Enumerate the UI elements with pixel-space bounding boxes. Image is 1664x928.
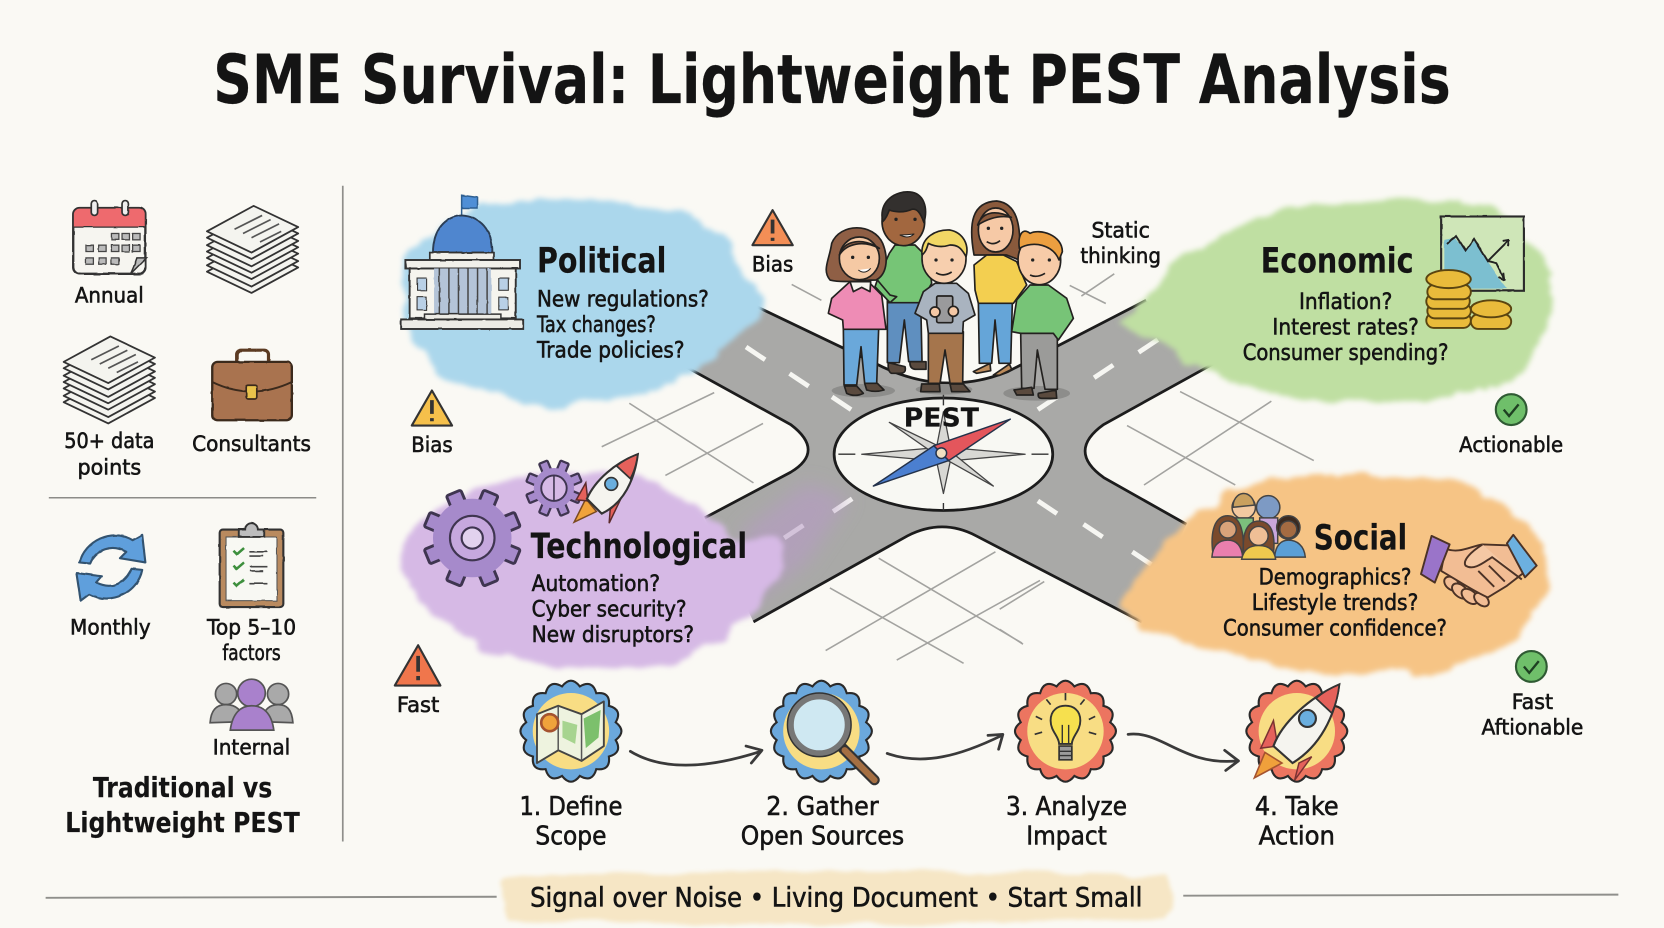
warning: fast [395, 645, 440, 718]
panel: technological [401, 451, 783, 667]
questions: technological [532, 571, 694, 648]
step 1: define scope [519, 681, 622, 852]
badge: map [520, 681, 621, 782]
step 4: take action [1246, 681, 1347, 852]
badge: magnifier [771, 681, 874, 782]
icon: monthly cycle arrows [76, 535, 145, 601]
footer banner: Signal over Noise • Living Document • Start Small [530, 882, 1142, 913]
label: static thinking: thinking [1080, 244, 1161, 269]
badge: light bulb [1015, 681, 1116, 782]
questions: social [1223, 565, 1447, 642]
heading: technological: Technological [531, 526, 747, 567]
questions: economic: Inflation? [1299, 289, 1392, 315]
label: internal: Internal [213, 736, 290, 761]
panel heading: traditional vs: Traditional vs [93, 771, 272, 804]
questions: economic [1243, 289, 1449, 366]
questions: technological: Cyber security? [532, 597, 687, 623]
purple tint over road [743, 483, 849, 610]
check: actionable [1459, 394, 1563, 458]
icon: briefcase [212, 350, 292, 420]
economic colour blob [1120, 200, 1549, 405]
icon: large gear [408, 474, 536, 602]
compass label: PEST [904, 404, 980, 434]
check: fast aftionable: Aftionable [1481, 715, 1583, 740]
icon: document stack, 50+ data points [64, 336, 155, 423]
step 2: gather open sources [741, 681, 904, 852]
step 1: define scope: Scope [535, 822, 606, 852]
panel: economic [1120, 200, 1549, 405]
questions: political: Trade policies? [536, 338, 684, 364]
check: fast aftionable [1481, 651, 1583, 740]
panel: political [399, 195, 764, 404]
check: actionable: Actionable [1459, 433, 1563, 458]
label: top 5-10: Top 5–10 [206, 616, 296, 641]
icon: line chart [1441, 216, 1524, 291]
process steps [519, 681, 1347, 852]
icon: rocket [574, 454, 638, 523]
step 2: gather open sources: Open Sources [741, 822, 904, 852]
step 4: take action: 4. Take [1255, 792, 1339, 822]
label: annual: Annual [75, 283, 144, 308]
people group [826, 192, 1073, 401]
warning: bias (orange) [752, 210, 793, 278]
social colour blob [1121, 473, 1549, 675]
icon: diverse group [1212, 493, 1305, 559]
step 3: analyze impact: 3. Analyze [1006, 792, 1127, 822]
warning: bias (yellow): Bias [411, 433, 453, 458]
step 3: analyze impact: Impact [1026, 822, 1107, 852]
panel: social [1121, 473, 1549, 675]
step 2: gather open sources: 2. Gather [766, 792, 879, 822]
person: man in green sweater [1012, 231, 1073, 398]
warning: bias (yellow) [411, 391, 453, 458]
label: factors: factors [222, 641, 281, 666]
arrow: step 3 to 4 [1128, 734, 1238, 770]
step 3: analyze impact [1006, 681, 1127, 852]
icon: government building [401, 195, 523, 329]
warning: fast: Fast [397, 693, 439, 718]
person: centre man with phone [915, 230, 975, 392]
technological colour blob [401, 477, 783, 667]
person: woman in pink [826, 228, 886, 395]
questions: social: Lifestyle trends? [1252, 590, 1418, 616]
questions: economic: Interest rates? [1272, 314, 1419, 340]
person: man with dark skin [875, 192, 932, 373]
warning: bias (orange): Bias [752, 253, 793, 278]
badge: rocket [1246, 681, 1347, 782]
questions: economic: Consumer spending? [1243, 340, 1449, 366]
heading: political: Political [537, 241, 666, 282]
icon: document stack [207, 206, 298, 293]
icon: gold coin stacks [1426, 270, 1511, 329]
person: woman in yellow [972, 201, 1027, 375]
questions: technological: Automation? [532, 571, 660, 597]
questions: social: Consumer confidence? [1223, 616, 1447, 642]
step 4: take action: Action [1259, 822, 1335, 852]
label: monthly: Monthly [70, 616, 151, 641]
label: static thinking: Static [1091, 219, 1150, 244]
icon: internal team [210, 679, 293, 730]
panel: traditional vs lightweight comparison [49, 201, 316, 839]
footer banner [502, 871, 1172, 924]
label: points: points [77, 455, 141, 480]
label: consultants: Consultants [192, 432, 311, 457]
questions: technological: New disruptors? [532, 622, 694, 648]
questions: political: New regulations? [537, 287, 709, 313]
questions: social: Demographics? [1259, 565, 1411, 591]
heading: social: Social [1314, 518, 1407, 559]
arrow: step 1 to 2 [630, 746, 762, 765]
heading: economic: Economic [1261, 241, 1414, 282]
check: fast aftionable: Fast [1512, 690, 1553, 715]
icon: handshake [1421, 535, 1537, 609]
political colour blob [399, 200, 764, 404]
icon: small gear [517, 451, 591, 525]
panel heading: lightweight pest: Lightweight PEST [65, 806, 300, 839]
label: static thinking [1080, 219, 1161, 269]
label: 50+ data points: 50+ data [64, 429, 154, 454]
centre compass [834, 395, 1053, 510]
questions: political: Tax changes? [536, 312, 656, 338]
icon: calendar (annual) [73, 201, 146, 274]
arrow: step 2 to 3 [887, 734, 1003, 759]
icon: clipboard with checklist [220, 523, 283, 607]
questions: political [536, 287, 709, 364]
compass needle [873, 419, 1010, 486]
step 1: define scope: 1. Define [519, 792, 622, 822]
compass rose [862, 412, 1025, 493]
road crossing [687, 300, 1223, 622]
